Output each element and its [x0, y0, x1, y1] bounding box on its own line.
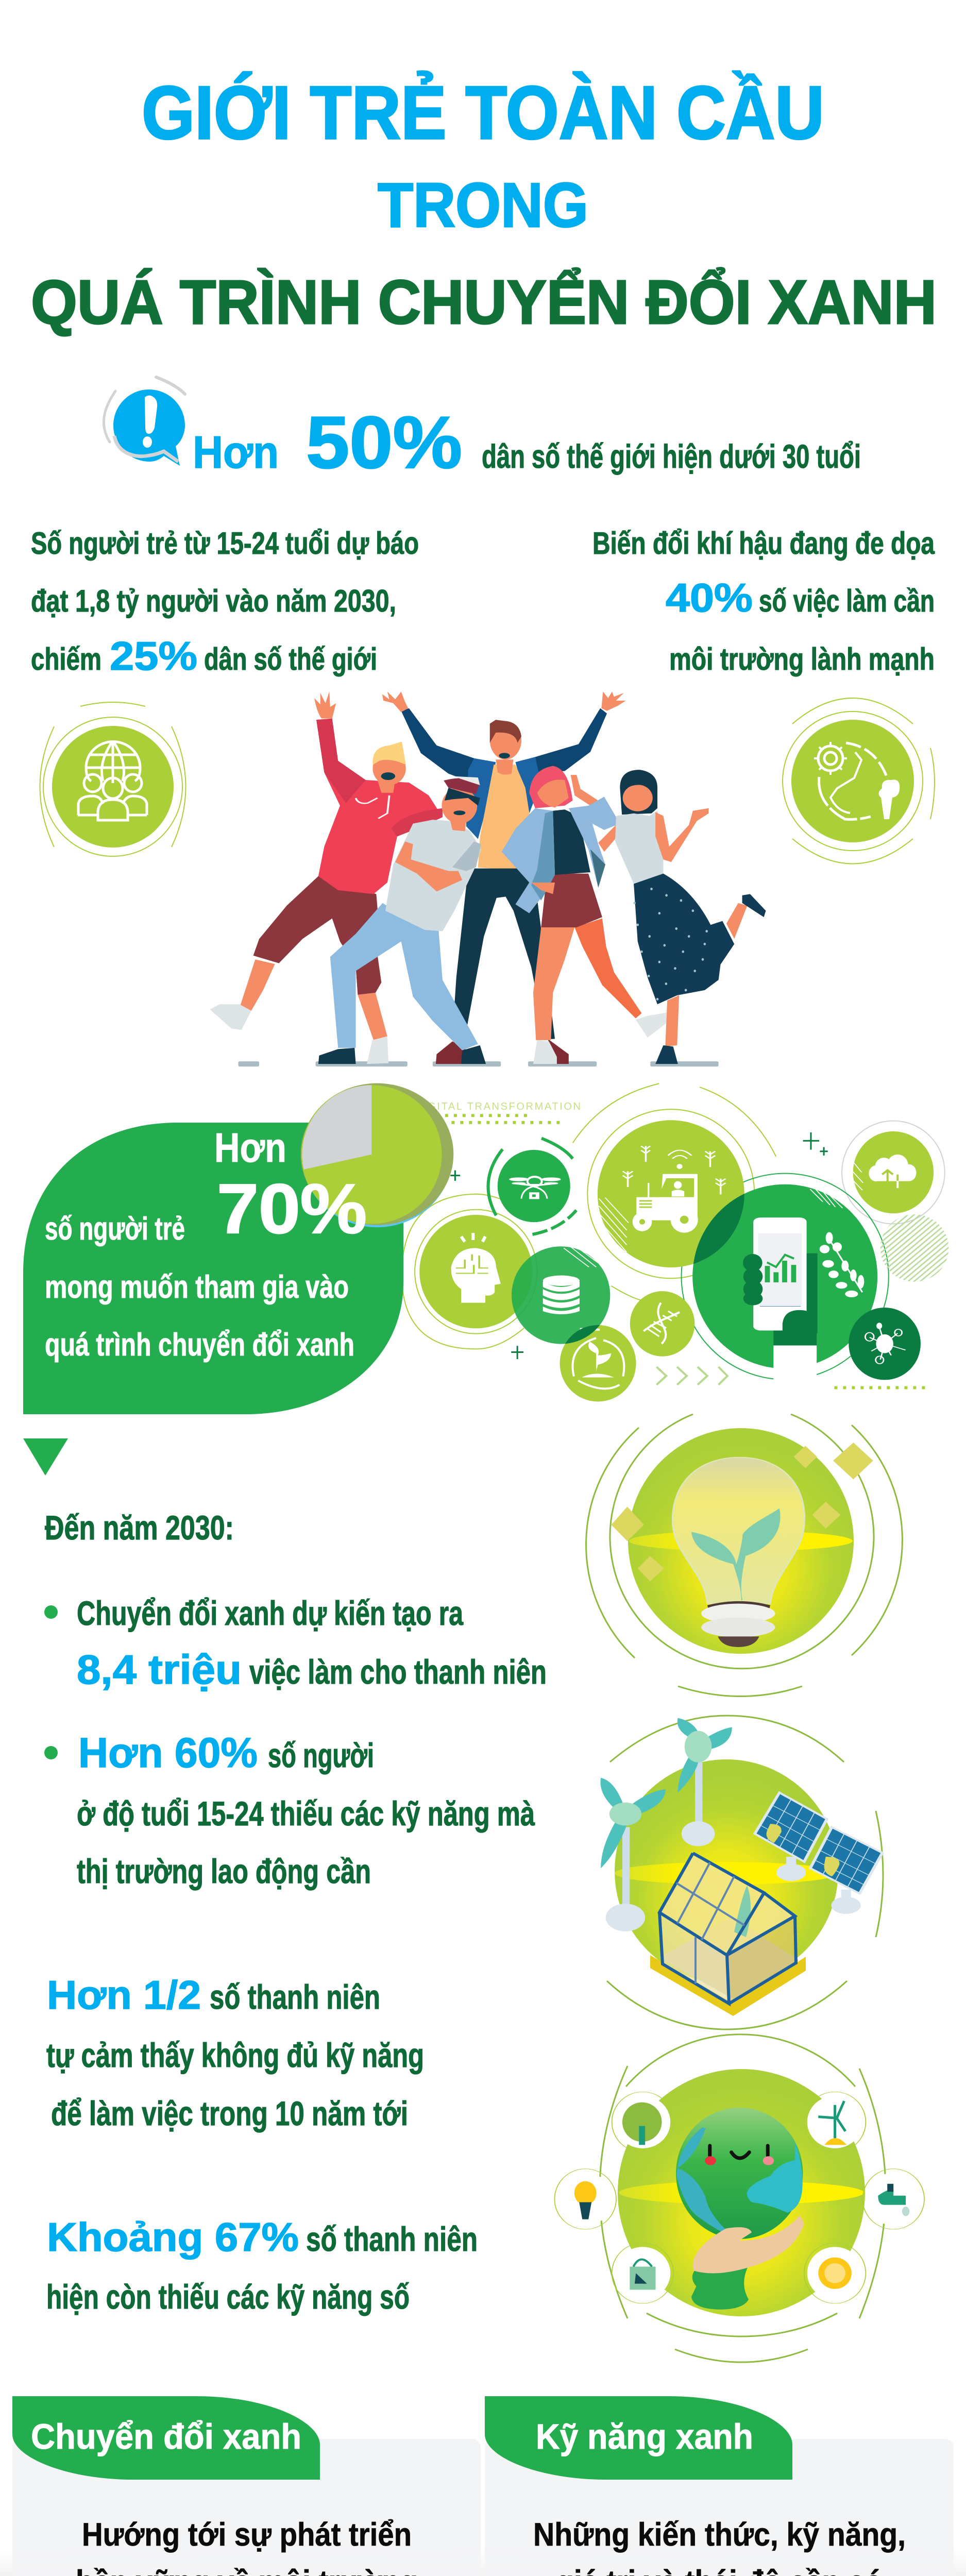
bullet: skills gap 60% — [44, 1730, 535, 1890]
person: black-haired woman in polka-dot skirt — [598, 770, 766, 1064]
earth globe — [676, 2108, 803, 2310]
thin orbit rings — [402, 1083, 945, 1380]
dark overlap: database over sprout — [565, 1325, 600, 1344]
callout heading: Hơn 70% — [214, 1125, 367, 1248]
tab: Kỹ năng xanh: Kỹ năng xanh — [536, 2417, 753, 2456]
illustration: green technology icon cluster — [402, 1083, 948, 1401]
bullet: green jobs: việc làm cho thanh niên — [249, 1653, 547, 1691]
stat: Hơn 50% — [193, 402, 861, 484]
bullet: skills gap 60%: số người — [268, 1736, 374, 1774]
pie chart: 70 percent — [301, 1083, 453, 1227]
callout heading: Hơn 70%: 70% — [217, 1170, 367, 1248]
callout text — [45, 1211, 354, 1363]
text block: more than half: tự cảm thấy không đủ kỹ năng — [46, 2036, 424, 2074]
illustration: wind turbines, solar panels, greenhouse — [600, 1716, 883, 2029]
text block: young people forecast: dân số thế giới — [204, 642, 377, 676]
icon: sprout cycle disc — [560, 1325, 636, 1401]
icon: network disc — [849, 1308, 921, 1380]
tab: Chuyển đổi xanh — [12, 2396, 320, 2480]
icon: exclamation speech bubble — [104, 377, 185, 466]
definition text: green skills: Những kiến thức, kỹ năng, — [533, 2517, 906, 2553]
icon: database disc — [512, 1246, 610, 1344]
dotted lines — [445, 1115, 929, 1388]
icon: climate earth, sun and bulb — [783, 698, 935, 863]
icon: DNA disc — [630, 1291, 694, 1357]
callout text: số người trẻ — [45, 1211, 185, 1247]
person: tall man in navy jacket — [382, 691, 626, 1064]
text block: young people forecast: chiếm — [31, 642, 101, 676]
text block: about 67% — [46, 2214, 478, 2316]
icon: tractor disc — [598, 1120, 744, 1267]
icon: globe and people — [40, 702, 185, 856]
tab: Chuyển đổi xanh: Chuyển đổi xanh — [31, 2417, 301, 2456]
plus signs — [450, 1132, 828, 1359]
person: red-haired woman in denim jacket — [502, 766, 671, 1064]
title: line 2: TRONG — [378, 170, 588, 240]
text block: climate change threat — [592, 526, 935, 676]
text block: about 67%: Khoảng 67% — [47, 2214, 299, 2260]
icon: hatched disc — [880, 1214, 948, 1282]
stat: Hơn 50%: 50% — [306, 402, 462, 484]
decorative chevrons — [656, 1367, 727, 1385]
text block: more than half: để làm việc trong 10 năm tới — [51, 2094, 408, 2132]
panel: green 70% callout — [23, 1083, 453, 1414]
illustration: light bulb with sprout — [586, 1414, 902, 1696]
background photo: lightbulb in hand with fade — [0, 2565, 966, 2576]
icon circles: tree, wind, bulb, tap, bag, sun — [554, 2092, 924, 2303]
bullet: green jobs: Chuyển đổi xanh dự kiến tạo ra — [77, 1594, 464, 1632]
bullet: green jobs: 8,4 triệu — [77, 1647, 242, 1692]
ground shadows — [238, 1061, 719, 1066]
callout text: quá trình chuyển đổi xanh — [45, 1327, 354, 1363]
text block: more than half: Hơn 1/2 — [47, 1972, 201, 2018]
text block: more than half: số thanh niên — [210, 1978, 380, 2016]
definition text: green skills — [516, 2517, 922, 2576]
text block: about 67%: hiện còn thiếu các kỹ năng số — [46, 2278, 410, 2316]
illustration: group of young people — [210, 691, 766, 1066]
callout text: mong muốn tham gia vào — [45, 1269, 349, 1305]
text block: climate change threat: 40% — [666, 575, 753, 620]
text block: young people forecast: đạt 1,8 tỷ người vào năm 2030, — [31, 584, 396, 618]
label: digital transformation: DIGITAL TRANSFORMATION — [415, 1101, 581, 1112]
definition text: green transition: Hướng tới sự phát triển — [82, 2517, 412, 2553]
text block: more than half — [46, 1972, 424, 2132]
icon: cloud disc — [852, 1131, 934, 1213]
heading: by 2030: Đến năm 2030: — [45, 1509, 234, 1547]
text block: young people forecast: 25% — [110, 633, 197, 679]
tab: Kỹ năng xanh — [485, 2396, 792, 2480]
title: line 1: GIỚI TRẺ TOÀN CẦU — [142, 71, 824, 155]
icon: brain head disc — [419, 1215, 532, 1328]
panel: Kỹ năng xanh — [485, 2396, 954, 2576]
hand — [693, 2215, 804, 2273]
callout heading: Hơn 70%: Hơn — [214, 1125, 286, 1171]
text block: about 67%: số thanh niên — [306, 2220, 478, 2258]
bullet: skills gap 60%: ở độ tuổi 15-24 thiếu các kỹ năng mà — [77, 1794, 535, 1833]
icon: drone disc — [488, 1138, 577, 1234]
illustration: smiling earth held in hand — [554, 2035, 924, 2362]
bullet: skills gap 60%: Hơn 60% — [78, 1730, 258, 1776]
title: line 3: QUÁ TRÌNH CHUYỂN ĐỔI XANH — [31, 267, 937, 337]
arrow: green triangle — [23, 1438, 68, 1476]
icon: smartphone and wheat disc — [692, 1184, 877, 1381]
bullet: green jobs — [44, 1594, 547, 1692]
text block: young people forecast: Số người trẻ từ 15-24 tuổi dự báo — [31, 526, 419, 561]
person: blond man in red hoodie — [210, 691, 443, 1064]
panel: Chuyển đổi xanh — [12, 2396, 481, 2576]
text block: young people forecast — [31, 526, 419, 679]
bullet: skills gap 60%: thị trường lao động cần — [77, 1852, 371, 1890]
definition text: green transition — [71, 2517, 422, 2576]
person: man in cap and white T-shirt — [318, 776, 486, 1064]
stat: Hơn 50%: Hơn — [193, 427, 279, 478]
